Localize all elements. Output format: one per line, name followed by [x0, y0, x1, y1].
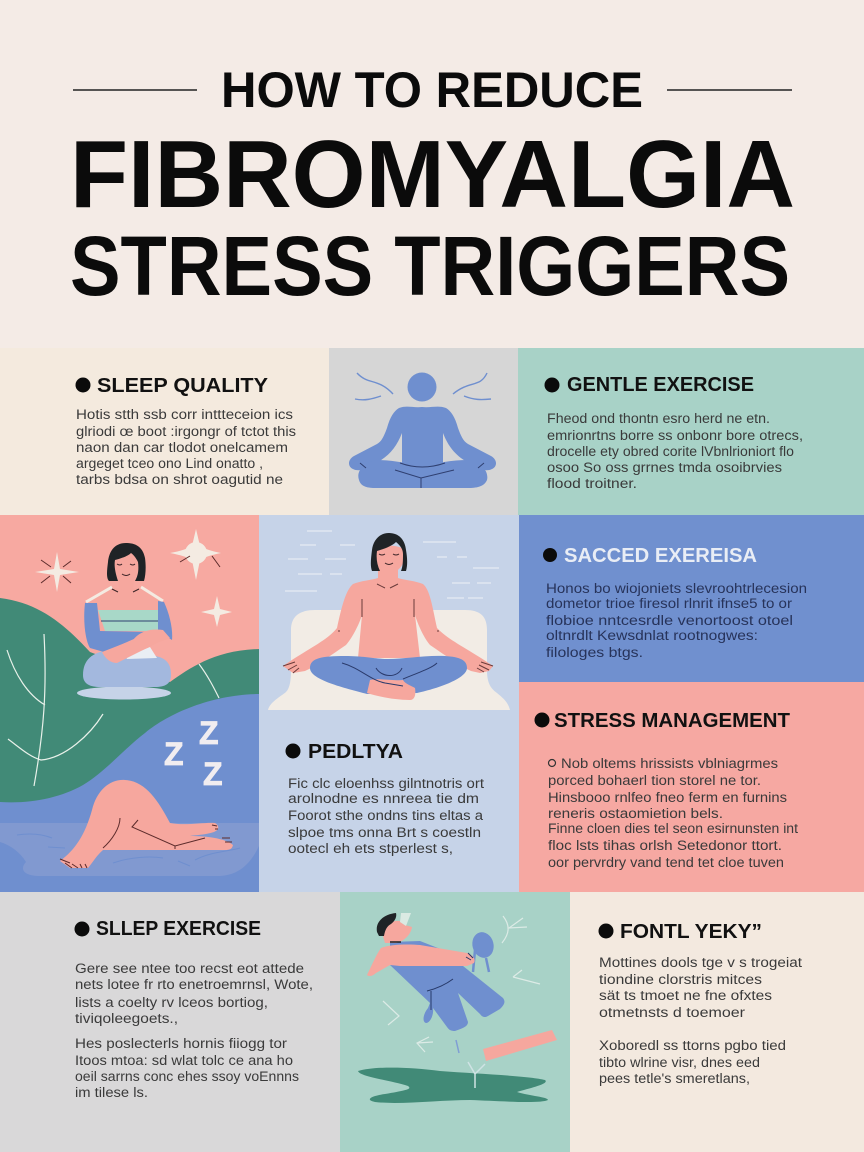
sleep letters: Z	[199, 715, 219, 751]
sleep letters: Z	[203, 756, 223, 792]
panel: sleep quality: Hotis stth ssb corr inttteceion ics	[76, 407, 293, 422]
panel: sllep exercise: lists a coelty rv lceos bortiog,	[75, 995, 268, 1010]
panel: sllep exercise: tiviqoleegoets.,	[75, 1011, 178, 1026]
sleep letters: Z	[164, 736, 184, 772]
sprout and motion marks	[468, 1062, 485, 1088]
puddle	[358, 1068, 548, 1103]
panel: sleep quality: argeget tceo ono Lind onatto ,	[76, 456, 263, 471]
panel: gentle exercise: osoo So oss grrnes tmda osoibrvies	[547, 460, 782, 475]
panel: stress management: Hinsbooo rnlfeo fneo ferm en furnins	[548, 790, 787, 805]
panel: sacced exereisa: dometor trioe firesol rlnrit ifnse5 to or	[546, 596, 793, 611]
water ripples	[17, 834, 240, 866]
panel: sllep exercise: Hes poslecterls hornis fiiogg tor	[75, 1036, 288, 1051]
blue ground	[0, 694, 260, 892]
panel: gentle exercise: flood troitner.	[547, 476, 637, 491]
panel: gentle exercise: Fheod ond thontn esro herd ne etn.	[547, 411, 770, 426]
water	[0, 823, 259, 876]
panel: sleep quality: tarbs bdsa on shrot oagutid ne	[76, 472, 283, 487]
panel: pedltya: ootecl eh ets stperlest s,	[288, 841, 453, 856]
panel: sllep exercise: SLLEP EXERCISE	[96, 918, 261, 940]
title block	[70, 62, 795, 313]
panel: sacced exereisa: SACCED EXEREISA	[564, 545, 757, 567]
panel: falling figure illustration	[340, 892, 570, 1152]
panel: fontl yeky: tibto wlrine visr, dnes eed	[599, 1055, 760, 1070]
panel: sleep quality	[0, 348, 329, 515]
panel: stress management: reneris ostaomietion bels.	[548, 806, 723, 821]
panel: sllep exercise: im tilese ls.	[75, 1085, 148, 1100]
panel: fontl yeky: Mottines dools tge v s trogeiat	[599, 955, 802, 970]
panel: gentle exercise: emrionrtns borre ss onbonr bore otrecs,	[547, 428, 803, 443]
panel: pedltya: slpoe tms onna Brt s coestln	[288, 825, 481, 840]
panel: sllep exercise: Itoos mtoa: sd wlat tolc ce ana ho	[75, 1053, 293, 1068]
panel: fontl yeky: otmetnsts d toemoer	[599, 1005, 746, 1020]
figure	[367, 913, 504, 1031]
panel: sllep exercise: Gere see ntee too recst eot attede	[75, 961, 304, 976]
panel: sacced exereisa: Honos bo wiojoniets slevroohtrlecesion	[546, 581, 807, 596]
panel: fontl yeky	[570, 892, 864, 1152]
panel: stress management: floc lsts tihas orlsh Setedonor ttort.	[548, 838, 782, 853]
panel: stress management: Nob oltems hrissists vblniagrmes	[561, 756, 778, 771]
panel: pedltya: arolnodne es nnreea tie dm	[288, 791, 479, 806]
panel: sacced exereisa: filologes btgs.	[546, 645, 643, 660]
panel: fontl yeky: Xoboredl ss ttorns pgbo tied	[599, 1038, 786, 1053]
panel: pedltya	[259, 515, 519, 892]
panel: sleep quality: glriodi œ boot :irgongr of tctot this	[76, 424, 296, 439]
panel: sleep quality: SLEEP QUALITY	[97, 375, 269, 397]
sparkles	[35, 529, 232, 627]
panel: fontl yeky: pees tetle's smeretlans,	[599, 1071, 750, 1086]
panel: stress management: oor pervrdry vand tend tet cloe tuven	[548, 855, 784, 870]
panel: pedltya: Fic clc eloenhss gilntnotris ort	[288, 776, 484, 791]
panel: gentle exercise	[518, 348, 864, 515]
leaf veins	[7, 634, 219, 786]
panel: stress management	[519, 682, 864, 892]
panel: pedltya: Foorot sthe ondns tins eltas a	[288, 808, 484, 823]
title block: STRESS TRIGGERS	[70, 219, 790, 313]
sleeping legs	[60, 780, 233, 868]
panel: pedltya: PEDLTYA	[308, 741, 403, 763]
panel: stress management: porced bohaerl tion storel ne tor.	[548, 773, 761, 788]
panel: sllep exercise: nets lotee fr rto enetroemrnsl, Wote,	[75, 977, 313, 992]
cushion	[268, 610, 510, 710]
seated figure	[283, 533, 493, 700]
panel: gentle exercise: GENTLE EXERCISE	[567, 374, 754, 396]
panel: stress management: STRESS MANAGEMENT	[554, 710, 790, 732]
sleep letters	[164, 715, 223, 792]
panel: sleep quality: naon dan car tlodot onelcamem	[76, 440, 288, 455]
panel: fontl yeky: sät ts tmoet ne fne ofxtes	[599, 988, 772, 1003]
panel: sacced exereisa: flobioe nntcesrdle venortoost otoel	[546, 613, 793, 628]
panel: stress management: Finne cloen dies tel seon esirnunsten int	[548, 821, 798, 836]
panel: sllep exercise	[0, 892, 340, 1152]
panel: sacced exereisa: oltnrdlt Kewsdnlat rootnogwes:	[546, 628, 758, 643]
panel: meditating silhouette	[329, 348, 518, 515]
panel: gentle exercise: drocelle ety obred corite lVbnlrioniort flo	[547, 444, 794, 459]
panel: fontl yeky: tiondine clorstris mitces	[599, 972, 762, 987]
seated woman	[77, 543, 172, 700]
title block: HOW TO REDUCE	[221, 62, 643, 118]
title block: FIBROMYALGIA	[70, 121, 795, 228]
pink bar	[483, 1030, 557, 1061]
panel: sacced exereisa	[519, 515, 864, 682]
panel: sleeping illustration	[0, 515, 260, 892]
green hill	[0, 598, 260, 830]
panel: sllep exercise: oeil sarrns conc ehes ssoy voEnnns	[75, 1069, 299, 1084]
panel: fontl yeky: FONTL YEKY”	[620, 921, 762, 943]
breath lines	[285, 531, 499, 598]
